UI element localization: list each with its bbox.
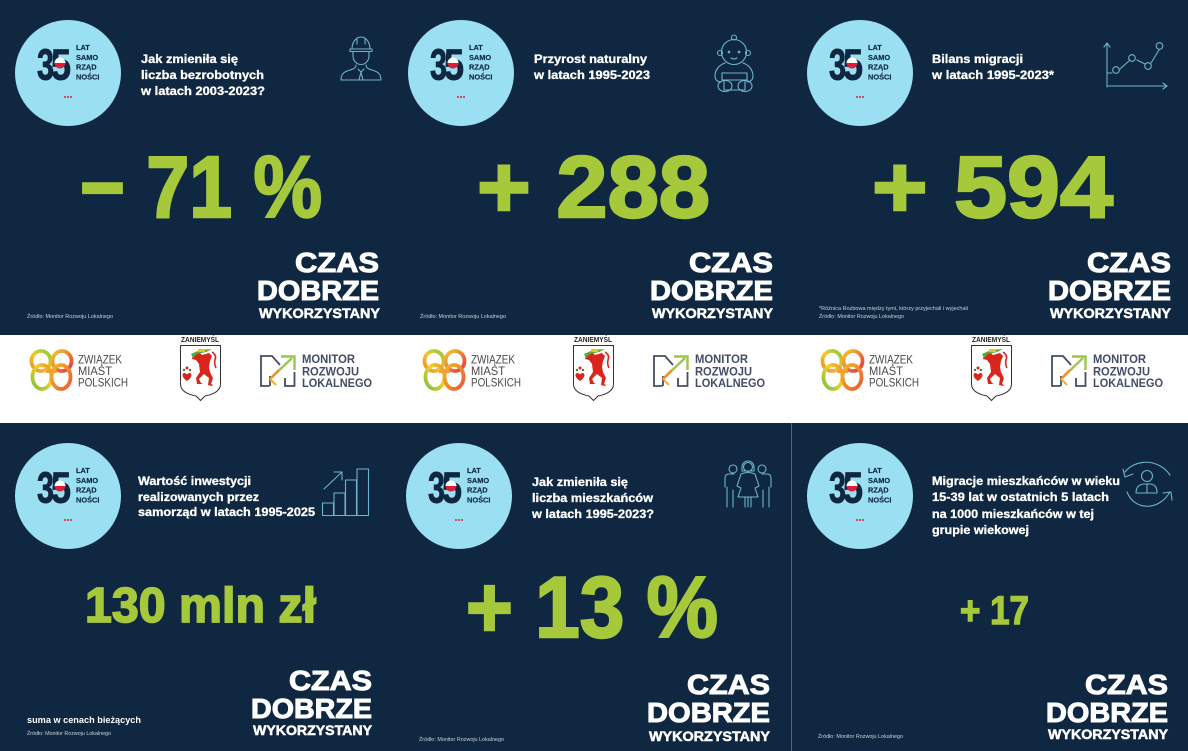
logo: Związek Miast Polskich: MIAST [78, 365, 112, 378]
logo: 35 lat samorządności: NOŚCI [467, 496, 490, 504]
logo: 35 lat samorządności: SAMO [868, 53, 890, 62]
crest: Zaniemyśl: ZANIEMYŚL [181, 335, 220, 344]
heading: grupie wiekowej [932, 523, 1029, 537]
logo: Monitor Rozwoju Lokalnego: LOKALNEGO [302, 376, 372, 390]
note and source [27, 715, 141, 737]
partner logos: group 3 [822, 335, 1163, 400]
logo: Monitor Rozwoju Lokalnego: ROZWOJU [302, 364, 359, 378]
slogan [650, 247, 773, 321]
big number: + 17 [960, 589, 1029, 633]
logo: 35 lat samorządności: 5 [442, 464, 462, 512]
logo: 35 lat samorządności [406, 443, 512, 549]
logo: 35 lat samorządności: 5 [51, 464, 71, 512]
logo: Monitor Rozwoju Lokalnego [261, 352, 372, 390]
panel: migration balance [807, 20, 1171, 321]
logo: Związek Miast Polskich [424, 351, 521, 390]
slogan: DOBRZE [257, 275, 379, 306]
heading: liczba bezrobotnych [141, 68, 264, 82]
slogan: DOBRZE [1048, 275, 1171, 306]
slogan [647, 669, 770, 744]
logo: 35 lat samorządności: RZĄD [467, 486, 488, 494]
crest: Zaniemyśl [972, 335, 1012, 400]
heading: Bilans migracji [932, 52, 1023, 66]
icon: worker in helmet [341, 37, 381, 80]
crest: Zaniemyśl [574, 335, 614, 400]
logo: 35 lat samorządności [15, 20, 121, 126]
heading: Jak zmieniła się [532, 475, 628, 489]
logo: Monitor Rozwoju Lokalnego: MONITOR [302, 352, 355, 366]
source: Źródło: Monitor Rozwoju Lokalnego [27, 313, 113, 320]
logo: 35 lat samorządności: RZĄD [76, 62, 97, 72]
source: *Różnica Rozbowa między tymi, którzy przyjechali i wyjechali [819, 306, 968, 312]
panel: investment [15, 443, 372, 738]
logo: 35 lat samorządności: SAMO [467, 476, 489, 485]
crest: Zaniemyśl: ZANIEMYŚL [972, 335, 1011, 344]
icon: person with circular arrows [1123, 462, 1172, 506]
slogan: DOBRZE [650, 275, 773, 306]
logo: Związek Miast Polskich: POLSKICH [78, 376, 128, 390]
logo: 35 lat samorządności: 5 [51, 40, 71, 90]
slogan: CZAS [1087, 247, 1171, 278]
heading: na 1000 mieszkańców w tej [932, 507, 1094, 521]
logo: 35 lat samorządności: RZĄD [76, 486, 97, 494]
source [819, 306, 968, 320]
logo: Monitor Rozwoju Lokalnego: ROZWOJU [695, 364, 752, 378]
slogan: WYKORZYSTANY [1048, 727, 1168, 742]
logo: 35 lat samorządności: 3 [829, 40, 846, 90]
slogan: CZAS [687, 669, 770, 700]
slogan: DOBRZE [251, 693, 372, 724]
logo: Monitor Rozwoju Lokalnego: LOKALNEGO [695, 376, 765, 390]
slogan [1048, 247, 1171, 321]
crest: Zaniemyśl [180, 335, 220, 400]
logo: Monitor Rozwoju Lokalnego [1052, 352, 1163, 390]
heading [533, 52, 650, 82]
slogan: CZAS [295, 247, 379, 278]
logo: 35 lat samorządności: 3 [37, 464, 54, 512]
heading: w latach 1995-2023? [531, 507, 654, 521]
icon: line chart [1104, 43, 1167, 89]
big number: + 13 % [466, 560, 718, 656]
icon: group of people [725, 461, 771, 507]
logo: 35 lat samorządności: NOŚCI [76, 72, 99, 82]
big number: + 594 [872, 139, 1113, 236]
big number: 130 mln zł [85, 579, 316, 633]
partner logos: group 1 [32, 335, 372, 400]
heading: Migracje mieszkańców w wieku [932, 474, 1120, 488]
slogan: CZAS [689, 247, 773, 278]
logo: 35 lat samorządności: RZĄD [469, 62, 490, 72]
logo: Monitor Rozwoju Lokalnego: ROZWOJU [1093, 364, 1150, 378]
logo: Związek Miast Polskich [822, 351, 919, 390]
slogan: WYKORZYSTANY [253, 723, 372, 738]
logo: 35 lat samorządności: 5 [843, 464, 863, 512]
slogan: WYKORZYSTANY [649, 729, 770, 744]
logo: 35 lat samorządności: LAT [467, 466, 481, 475]
heading: samorząd w latach 1995-2025 [138, 505, 315, 519]
logo: 35 lat samorządności: NOŚCI [868, 496, 891, 504]
logo: Związek Miast Polskich: ZWIĄZEK [471, 354, 515, 366]
logo: Monitor Rozwoju Lokalnego: LOKALNEGO [1093, 376, 1163, 390]
logo: Związek Miast Polskich: MIAST [471, 365, 505, 378]
logo: 35 lat samorządności: NOŚCI [76, 496, 99, 504]
logo: 35 lat samorządności: LAT [76, 466, 90, 475]
logo: 35 lat samorządności: 5 [843, 40, 863, 90]
slogan: DOBRZE [1046, 697, 1168, 728]
source: Źródło: Monitor Rozwoju Lokalnego [818, 733, 903, 740]
source: Źródło: Monitor Rozwoju Lokalnego [420, 313, 506, 320]
white logo band [0, 335, 1188, 423]
logo: Związek Miast Polskich: POLSKICH [471, 376, 521, 390]
slogan: CZAS [289, 665, 372, 696]
logo: Związek Miast Polskich: ZWIĄZEK [869, 354, 913, 366]
logo: 35 lat samorządności: 3 [37, 40, 54, 90]
logo: 35 lat samorządności: LAT [76, 43, 90, 52]
panel: young migration [807, 443, 1172, 742]
logo: 35 lat samorządności: NOŚCI [469, 72, 492, 82]
logo: 35 lat samorządności: LAT [868, 43, 882, 52]
logo: 35 lat samorządności: RZĄD [868, 486, 889, 494]
slogan [251, 665, 372, 738]
heading [138, 474, 315, 519]
heading [531, 475, 654, 521]
slogan: WYKORZYSTANY [1050, 306, 1171, 321]
heading: 15-39 lat w ostatnich 5 latach [932, 490, 1109, 504]
logo: 35 lat samorządności: 5 [444, 40, 464, 90]
logo: Monitor Rozwoju Lokalnego: MONITOR [695, 352, 748, 366]
heading: realizowanych przez [138, 490, 259, 504]
note and source: suma w cenach bieżących [27, 715, 141, 725]
logo: Monitor Rozwoju Lokalnego: MONITOR [1093, 352, 1146, 366]
heading [931, 52, 1054, 82]
logo: 35 lat samorządności: NOŚCI [868, 72, 891, 82]
logo: 35 lat samorządności [15, 443, 121, 549]
slogan: WYKORZYSTANY [259, 306, 380, 321]
logo: 35 lat samorządności: LAT [469, 43, 483, 52]
big number: + 288 [477, 139, 710, 236]
logo: 35 lat samorządności: 3 [430, 40, 447, 90]
heading [932, 474, 1120, 537]
logo: 35 lat samorządności: SAMO [868, 476, 890, 485]
logo: 35 lat samorządności: SAMO [76, 53, 98, 62]
logo: 35 lat samorządności [408, 20, 514, 126]
partner logos: group 2 [424, 335, 765, 400]
panel: unemployment [15, 20, 381, 321]
logo: 35 lat samorządności: SAMO [469, 53, 491, 62]
logo: Monitor Rozwoju Lokalnego [654, 352, 765, 390]
heading: w latach 2003-2023? [140, 84, 265, 98]
heading: Jak zmieniła się [141, 52, 238, 66]
slogan: DOBRZE [647, 697, 770, 728]
logo: 35 lat samorządności: 3 [428, 464, 445, 512]
note and source: Źródło: Monitor Rozwoju Lokalnego [27, 730, 111, 737]
icon: rising bars [322, 469, 368, 516]
heading: Przyrost naturalny [534, 52, 647, 66]
slogan: CZAS [1085, 669, 1168, 700]
big number: − 71 % [80, 139, 322, 236]
logo: 35 lat samorządności: RZĄD [868, 62, 889, 72]
source: Źródło: Monitor Rozwoju Lokalnego [819, 313, 904, 320]
heading: w latach 1995-2023* [931, 68, 1054, 82]
logo: 35 lat samorządności: 3 [829, 464, 846, 512]
logo: 35 lat samorządności [807, 20, 913, 126]
logo: Związek Miast Polskich: POLSKICH [869, 376, 919, 390]
logo: 35 lat samorządności: SAMO [76, 476, 98, 485]
logo: Związek Miast Polskich: ZWIĄZEK [78, 354, 122, 366]
heading: Wartość inwestycji [138, 474, 251, 488]
slogan: WYKORZYSTANY [652, 306, 773, 321]
source: Źródło: Monitor Rozwoju Lokalnego [419, 736, 504, 743]
logo: Związek Miast Polskich [32, 351, 128, 390]
crest: Zaniemyśl: ZANIEMYŚL [574, 335, 613, 344]
slogan [257, 247, 380, 321]
panel: population [406, 443, 771, 744]
slogan [1046, 669, 1168, 742]
logo: 35 lat samorządności [807, 443, 913, 549]
heading: w latach 1995-2023 [533, 68, 650, 82]
heading [140, 52, 265, 98]
panel: natural increase [408, 20, 773, 321]
icon: baby [715, 35, 753, 92]
logo: 35 lat samorządności: LAT [868, 466, 882, 475]
heading: liczba mieszkańców [532, 491, 654, 505]
logo: Związek Miast Polskich: MIAST [869, 365, 903, 378]
